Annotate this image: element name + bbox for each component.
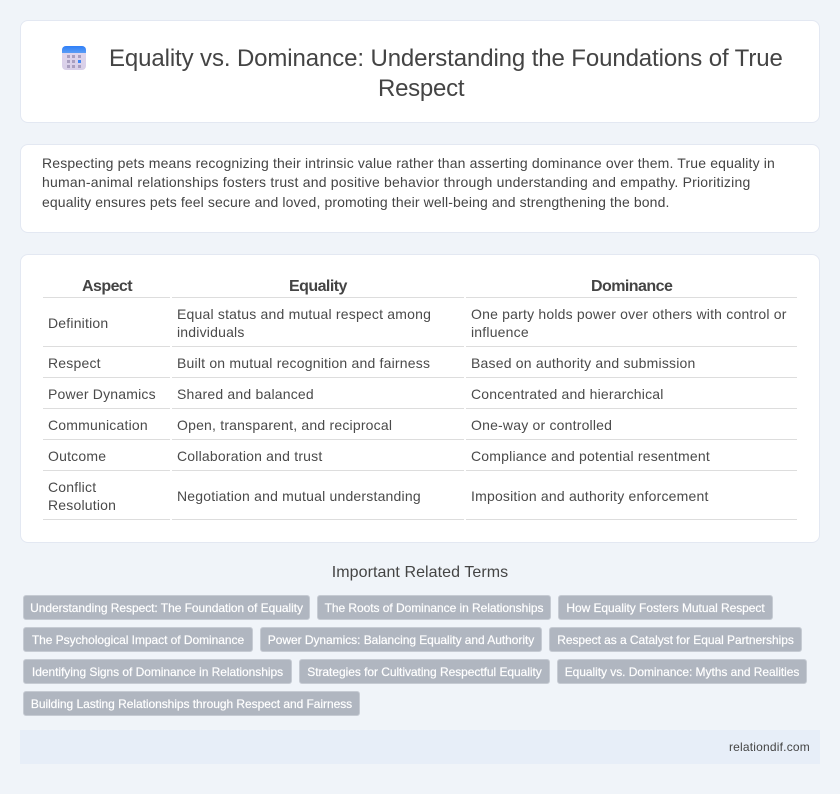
panel: comparison table (20, 254, 820, 543)
tag: Strategies for Cultivating Respectful Equality (307, 665, 542, 679)
row: outcome: Outcome (48, 448, 106, 464)
tag: Equality vs. Dominance: Myths and Realities (565, 665, 799, 679)
tag (23, 691, 360, 716)
footer source: relationdif.com (729, 740, 810, 754)
tag (260, 627, 542, 652)
tag: How Equality Fosters Mutual Respect (566, 601, 765, 615)
comparison table: Equal status and mutual respect among (177, 306, 431, 322)
row: conflict resolution (48, 479, 116, 513)
comparison table: Imposition and authority enforcement (471, 488, 709, 504)
tag (23, 627, 253, 652)
comparison table: Built on mutual recognition and fairness (177, 355, 430, 371)
tag: Identifying Signs of Dominance in Relationships (32, 665, 283, 679)
title: Respect (378, 75, 464, 102)
tag (23, 595, 310, 620)
tag (549, 627, 802, 652)
tag: Understanding Respect: The Foundation of Equality (30, 601, 303, 615)
comparison table: Concentrated and hierarchical (471, 386, 664, 402)
intro text: human-animal relationships fosters trust and positive behavior through understanding and empathy. Prioritizing (42, 174, 750, 190)
title: Equality vs. Dominance: Understanding the Foundations of True (109, 45, 783, 72)
comparison table: Based on authority and submission (471, 355, 696, 371)
tag (317, 595, 551, 620)
comparison table: Collaboration and trust (177, 448, 322, 464)
row: conflict resolution: Resolution (48, 497, 116, 513)
footer bar (20, 730, 820, 764)
comparison table: Negotiation and mutual understanding (177, 488, 421, 504)
tag (23, 659, 292, 684)
column heading: dominance: Dominance (591, 278, 672, 295)
heading: related terms: Important Related Terms (332, 564, 508, 581)
comparison table: Open, transparent, and reciprocal (177, 417, 392, 433)
row: power dynamics: Power Dynamics (48, 386, 156, 402)
comparison table: Compliance and potential resentment (471, 448, 710, 464)
tag (558, 595, 773, 620)
tag (557, 659, 807, 684)
tag: Respect as a Catalyst for Equal Partnerships (557, 633, 794, 647)
tag: Power Dynamics: Balancing Equality and Authority (268, 633, 534, 647)
comparison table: Shared and balanced (177, 386, 314, 402)
comparison table: One-way or controlled (471, 417, 612, 433)
comparison table: individuals (177, 324, 245, 340)
comparison table: influence (471, 324, 529, 340)
intro text: equality ensures pets feel secure and loved, promoting their well-being and strengthening the bond. (42, 194, 670, 210)
row: communication: Communication (48, 417, 148, 433)
intro text (42, 154, 775, 210)
column heading: aspect: Aspect (82, 278, 132, 295)
icon: calendar (62, 46, 86, 70)
panel: header (20, 20, 820, 123)
column heading: equality: Equality (289, 278, 347, 295)
row: definition: Definition (48, 315, 108, 331)
title (109, 45, 783, 102)
tag: The Roots of Dominance in Relationships (325, 601, 543, 615)
row: respect: Respect (48, 355, 101, 371)
tag: Building Lasting Relationships through Respect and Fairness (31, 697, 352, 711)
tag (299, 659, 550, 684)
row: conflict resolution: Conflict (48, 479, 96, 495)
panel: introduction (20, 144, 820, 233)
comparison table: One party holds power over others with control or (471, 306, 787, 322)
tag: The Psychological Impact of Dominance (32, 633, 244, 647)
intro text: Respecting pets means recognizing their intrinsic value rather than asserting dominance over them. True equality in (42, 154, 775, 170)
